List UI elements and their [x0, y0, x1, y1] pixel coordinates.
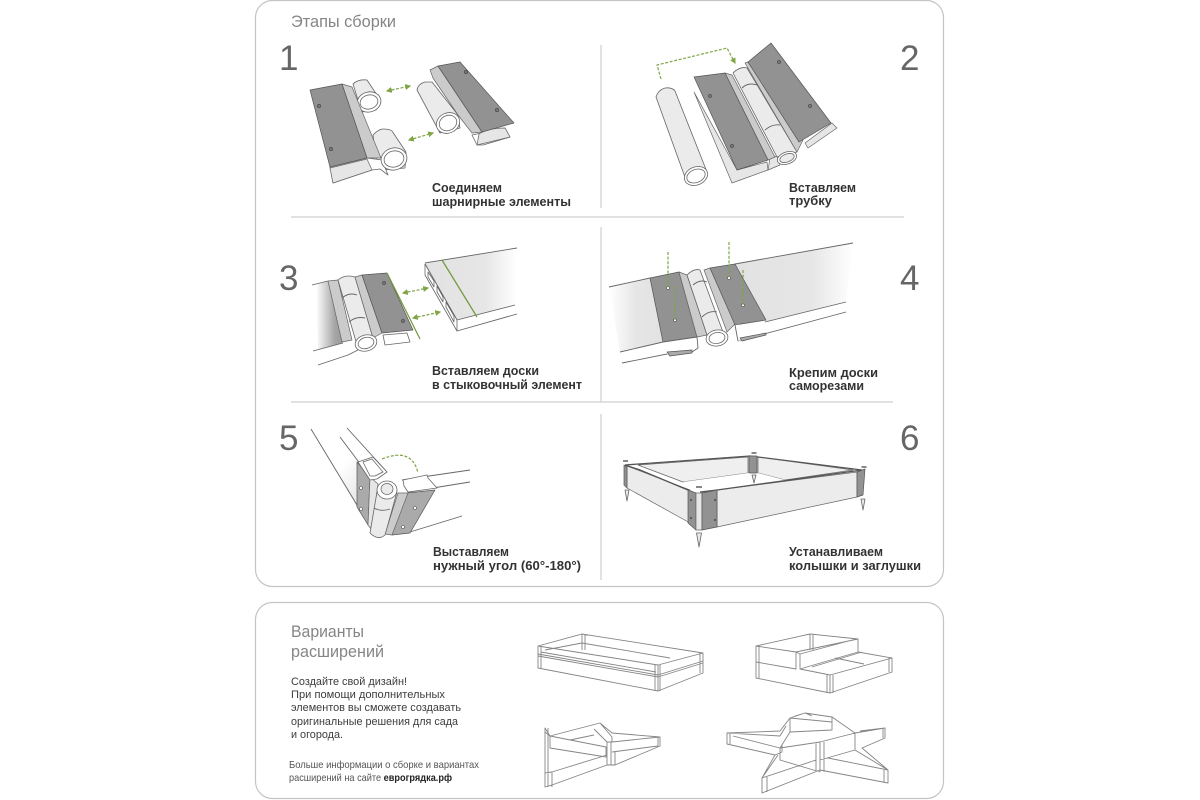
- illustration: double height rectangular bed: [538, 634, 703, 691]
- illustration: fixing boards with screws: [609, 243, 853, 363]
- heading: extension options: расширений: [291, 642, 384, 661]
- caption 4: [789, 365, 878, 393]
- caption 6: [789, 544, 921, 573]
- step number 2: 2: [900, 39, 919, 78]
- text: description: При помощи дополнительных: [291, 689, 445, 701]
- arrow: insert tube: [657, 48, 735, 79]
- caption 6: колышки и заглушки: [789, 558, 921, 573]
- step number 4: 4: [900, 259, 919, 298]
- text: description: оригинальные решения для сада: [291, 716, 459, 728]
- caption 1: Соединяем: [432, 180, 502, 195]
- caption 2: трубку: [789, 193, 833, 208]
- step number 3: 3: [279, 259, 298, 298]
- caption 2: [789, 180, 856, 208]
- caption 3: в стыковочный элемент: [432, 377, 582, 392]
- text: description: Создайте свой дизайн!: [291, 676, 407, 688]
- caption 5: нужный угол (60°-180°): [433, 558, 581, 573]
- step number 6: 6: [900, 419, 919, 458]
- illustration: corner angle: [311, 428, 470, 538]
- caption 6: Устанавливаем: [789, 544, 883, 559]
- step 5: [279, 419, 581, 573]
- caption 3: Вставляем доски: [432, 363, 539, 378]
- panel: extension options: [256, 602, 944, 798]
- caption 5: [433, 544, 581, 573]
- step 4: [609, 242, 919, 393]
- panel: assembly steps: [256, 0, 944, 586]
- text: more information: Больше информации о сборке и вариантах: [289, 759, 480, 771]
- arrows: join direction: [387, 86, 433, 140]
- caption 2: Вставляем: [789, 180, 856, 195]
- step number 1: 1: [279, 39, 298, 78]
- heading: extension options: [291, 622, 384, 661]
- illustration: star shaped bed: [727, 713, 888, 793]
- illustration: stepped bed: [756, 634, 892, 693]
- text: more information: [289, 759, 480, 784]
- caption 1: [432, 180, 571, 209]
- caption 1: шарнирные элементы: [432, 194, 571, 209]
- caption 4: саморезами: [789, 378, 864, 393]
- text: description: элементов вы сможете создавать: [291, 702, 461, 714]
- illustration: board and connector: [312, 248, 517, 365]
- text: description: и огорода.: [291, 729, 343, 741]
- text: more information: расширений на сайте еврогрядка.рф: [289, 772, 452, 784]
- arrows: insert board: [403, 288, 440, 318]
- illustration: tube and hinge: [656, 43, 837, 189]
- heading: assembly steps: Этапы сборки: [291, 12, 396, 31]
- illustration: hinge elements: [310, 62, 514, 183]
- caption 4: Крепим доски: [789, 365, 878, 380]
- step 1: [279, 39, 571, 209]
- step number 5: 5: [279, 419, 298, 458]
- arrow: rotation arc: [382, 455, 418, 473]
- step 3: [279, 248, 582, 392]
- illustration: triangular bed: [545, 723, 660, 787]
- illustration: assembled bed with stakes: [623, 452, 866, 547]
- text: description: [291, 676, 461, 741]
- heading: extension options: Варианты: [291, 622, 364, 641]
- step 2: [656, 39, 919, 208]
- step 6: [623, 419, 921, 573]
- green alignment lines: [387, 260, 477, 339]
- green screw guides: [668, 242, 743, 320]
- caption 5: Выставляем: [433, 544, 509, 559]
- caption 3: [432, 363, 582, 392]
